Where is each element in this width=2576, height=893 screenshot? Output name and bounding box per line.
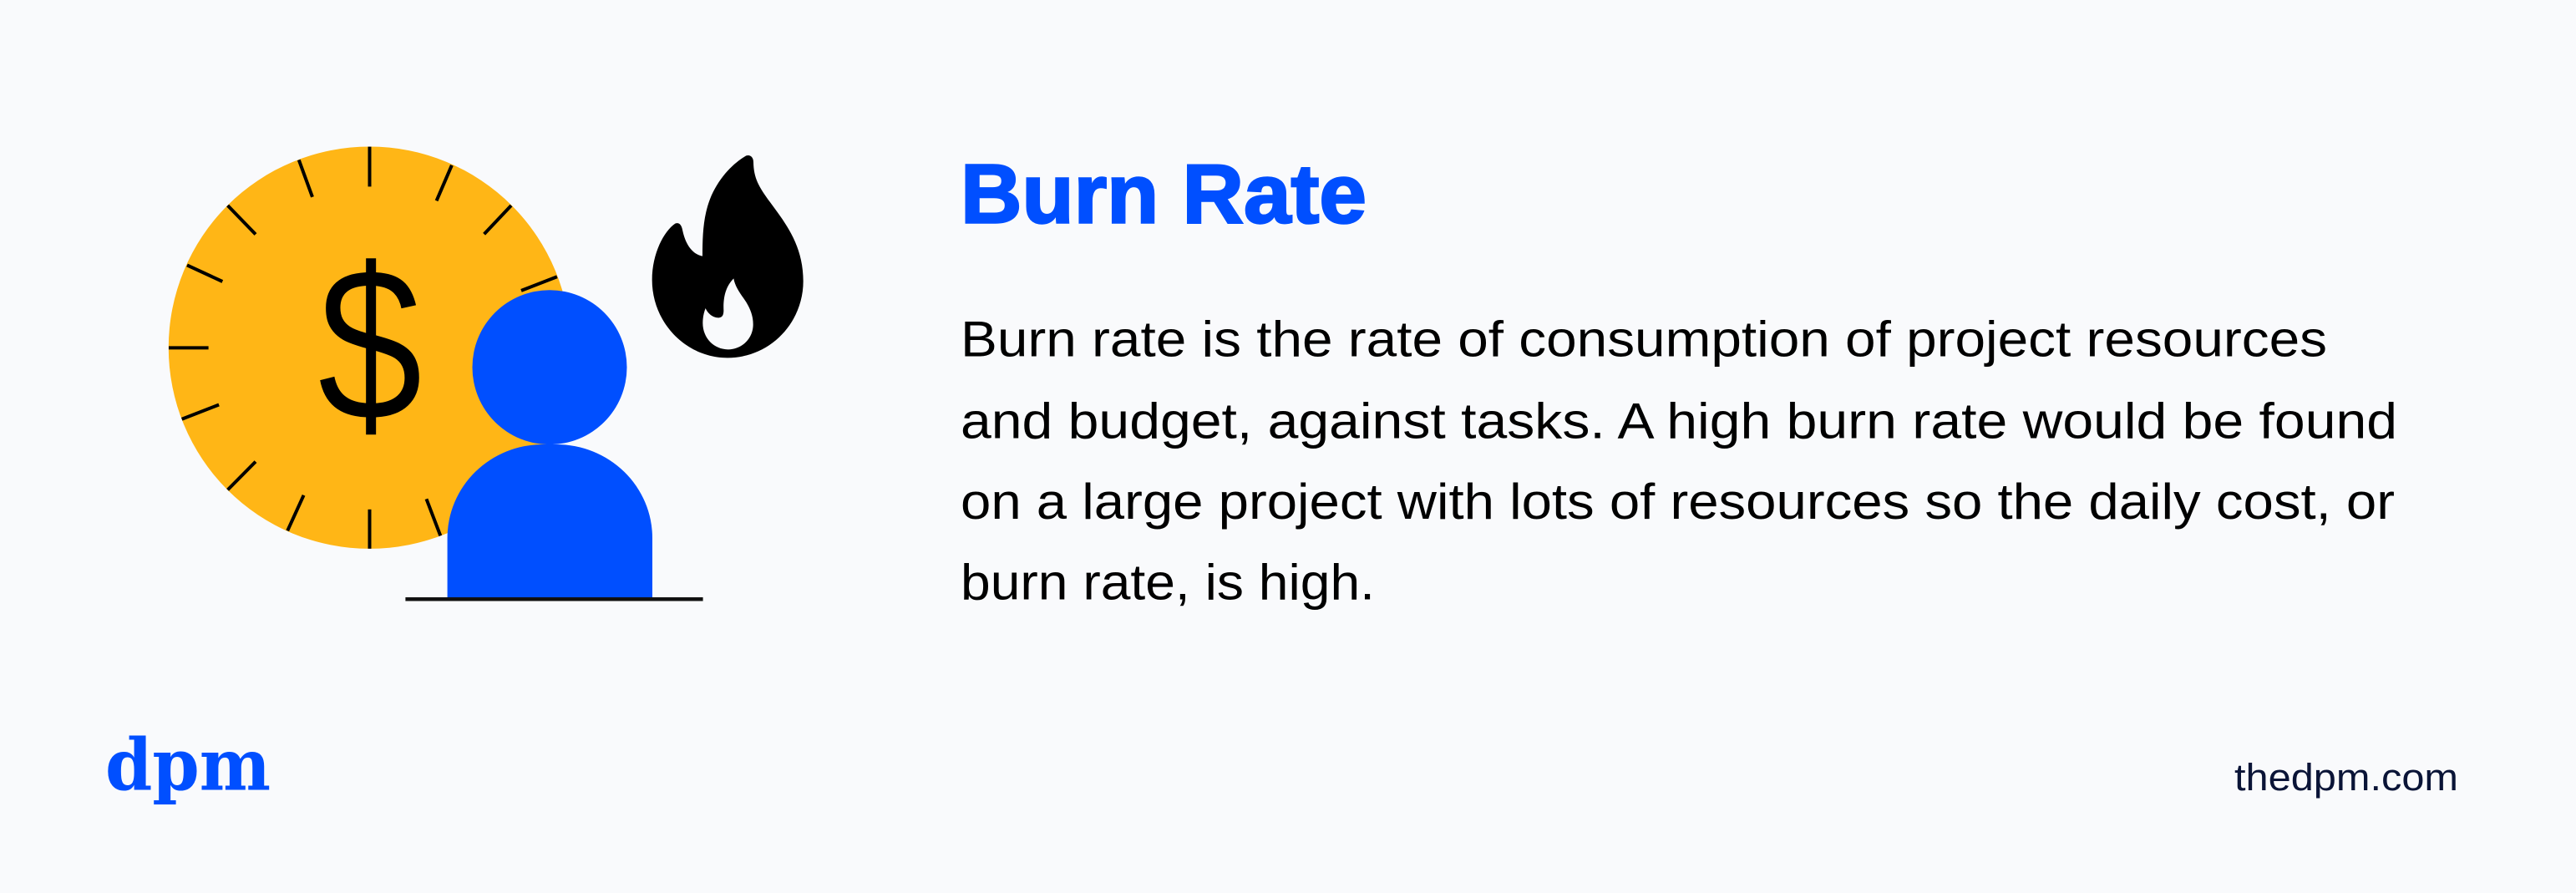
line 3: on a large project with lots of resources so the daily cost, or xyxy=(961,474,2395,530)
person body xyxy=(448,444,652,598)
line 2: and budget, against tasks. A high burn rate would be found xyxy=(961,393,2397,449)
inner flame xyxy=(702,278,753,349)
ground line xyxy=(405,597,703,601)
definition text block xyxy=(961,312,2397,611)
illustration: coin, person and flame xyxy=(169,147,804,601)
coin disc xyxy=(169,147,570,549)
title: Burn Rate xyxy=(961,148,1367,241)
dollar sign: $ xyxy=(317,222,423,468)
outer flame xyxy=(652,155,804,358)
icon: dollar coin xyxy=(169,147,570,549)
icon: person xyxy=(405,290,703,601)
coin edge ticks xyxy=(169,147,557,549)
logo: dpm: dpm xyxy=(105,724,271,808)
line 1: Burn rate is the rate of consumption of project resources xyxy=(961,312,2327,368)
website url: thedpm.com xyxy=(2234,756,2458,799)
person head xyxy=(473,290,626,444)
icon: flame xyxy=(652,155,804,358)
line 4: burn rate, is high. xyxy=(961,555,1375,611)
